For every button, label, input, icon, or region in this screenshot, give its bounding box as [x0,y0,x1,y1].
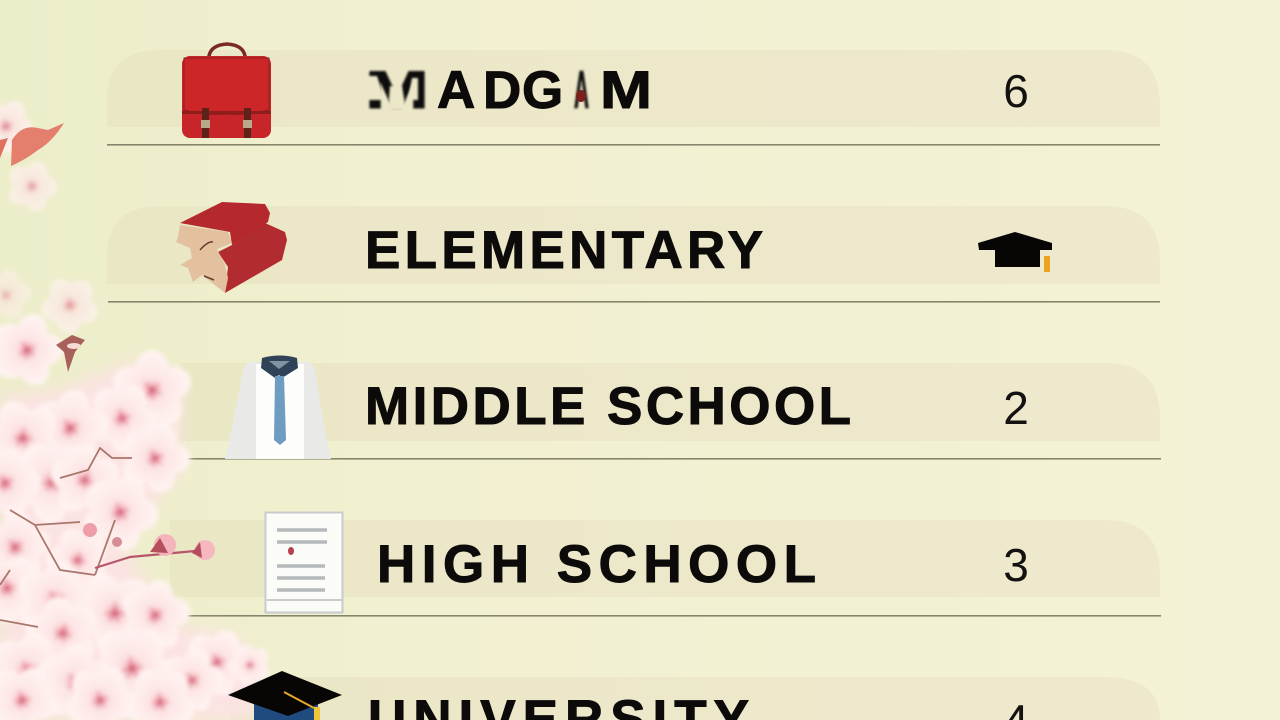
heading: madgam: A [574,61,589,120]
icon: shirt and tie [225,356,331,459]
heading: madgam: M [365,61,429,120]
band [230,677,1160,720]
heading: madgam: ADG [437,61,563,120]
icon: stacked red books [176,202,287,293]
cherry blossoms [0,88,280,720]
icon: red school bag [182,44,271,138]
red leaf [11,123,64,166]
heading: high school: HIGH SCHOOL [377,535,816,594]
row: elementary [107,202,1160,303]
rule [187,458,1161,460]
heading: madgam [364,61,652,120]
band [107,206,1160,284]
icon: graduation cap [228,671,342,720]
band [107,50,1160,127]
row: madgam [107,44,1160,146]
upper bud [56,335,85,372]
buds [83,523,215,560]
icon: document [266,512,342,612]
band [170,520,1160,597]
value: 6: 6 [1003,65,1029,117]
blossom haze [0,362,262,720]
row: middle school [180,356,1161,460]
icon: small graduation cap [978,232,1052,272]
row: high school [170,512,1161,617]
upper blossoms [0,88,112,398]
rule [108,301,1160,303]
value: 3: 3 [1003,539,1029,591]
heading: elementary: ELEMENTARY [365,221,763,280]
leaf fragment [0,138,8,158]
rule [188,615,1161,617]
band [180,363,1160,441]
heading: madgam: M [600,61,652,120]
heading: middle school: MIDDLE SCHOOL [365,377,851,436]
branches [0,448,195,627]
value: 2: 2 [1003,382,1029,434]
row: university [230,677,1160,720]
rule [107,144,1160,146]
lower blossom cluster [0,350,280,720]
